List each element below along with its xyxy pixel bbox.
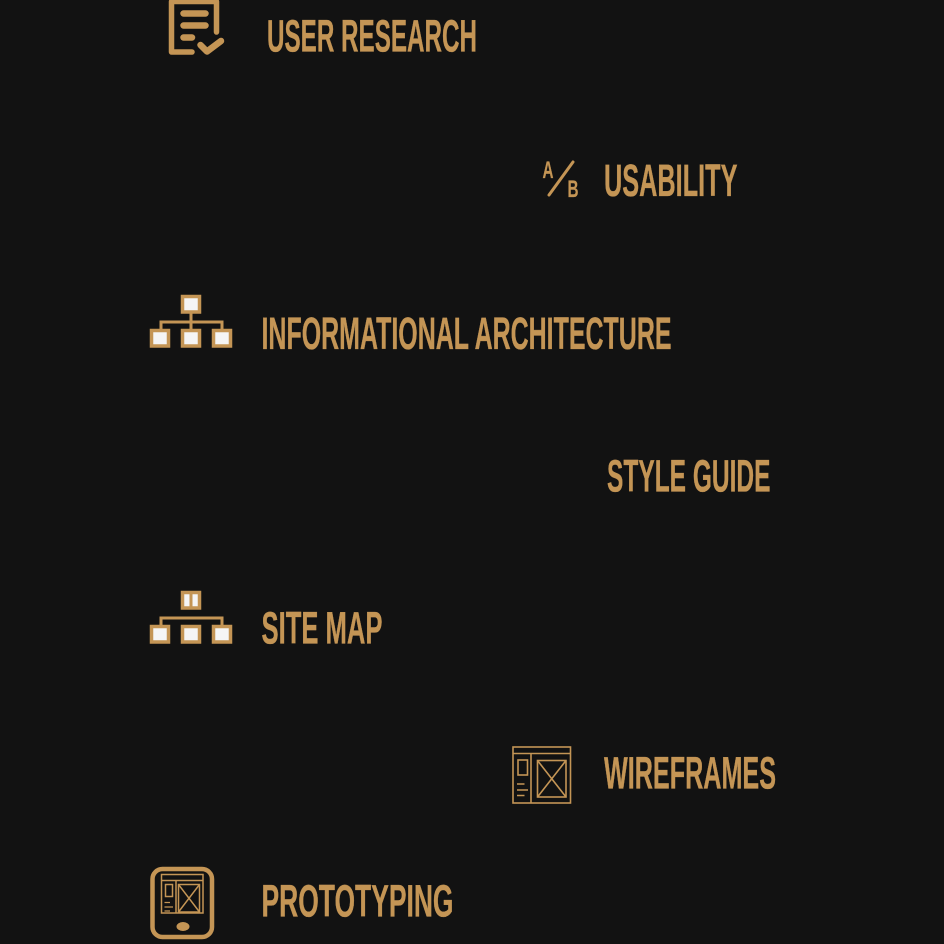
heading: usability: USABILITY <box>604 155 738 206</box>
heading: user research: USER RESEARCH <box>267 10 477 62</box>
icon: document checklist <box>172 2 221 52</box>
heading: site map: SITE MAP <box>262 602 382 654</box>
icon: A/B test: B <box>568 176 578 203</box>
icon: information hierarchy <box>152 296 230 346</box>
icon: wireframe layout <box>513 747 570 803</box>
heading: wireframes: WIREFRAMES <box>604 748 776 798</box>
icon: tablet prototype <box>152 869 212 937</box>
icon: site map hierarchy <box>152 592 230 642</box>
heading: style guide: STYLE GUIDE <box>607 450 770 502</box>
icon: A/B test <box>542 157 578 203</box>
heading: prototyping: PROTOTYPING <box>262 876 454 926</box>
icon: A/B test: A <box>542 157 554 184</box>
